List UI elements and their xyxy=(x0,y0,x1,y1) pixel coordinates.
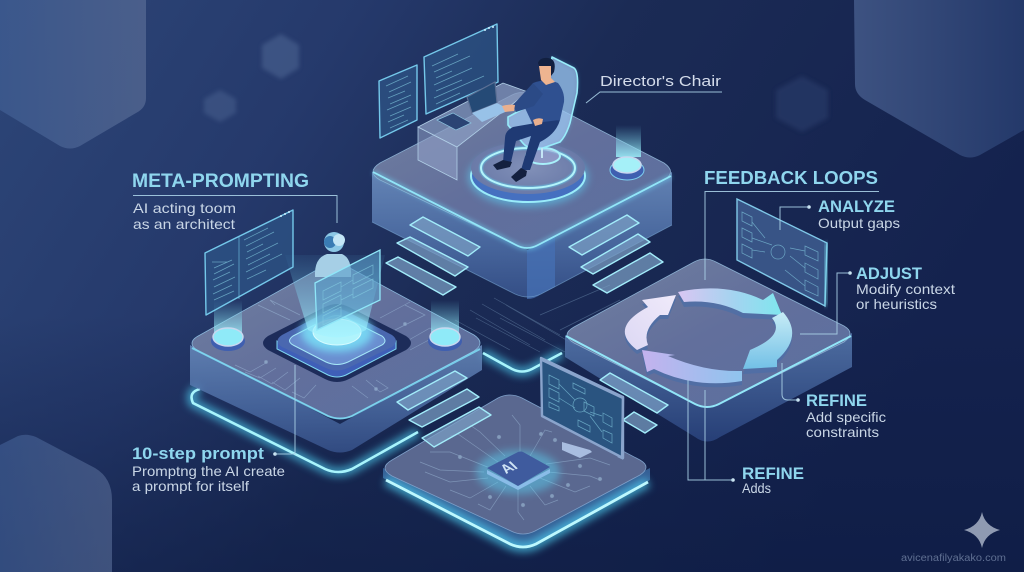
arrow: top xyxy=(678,288,782,315)
slabs beneath top platform xyxy=(386,215,663,295)
label: refine specific: Add specific xyxy=(806,409,886,425)
glow line: left base xyxy=(192,353,562,472)
monitor foreground edge xyxy=(542,360,623,458)
panel: bottom AI chip platform xyxy=(383,395,650,547)
label: meta-prompting: AI acting toom xyxy=(133,200,236,216)
circuit traces under top platform xyxy=(455,285,640,352)
icon: robot xyxy=(315,232,351,277)
label: 10-step prompt: Promptng the AI create xyxy=(132,463,285,479)
label: refine adds: REFINE xyxy=(742,465,804,483)
panel: right feedback platform xyxy=(565,259,852,442)
label: 10-step prompt: a prompt for itself xyxy=(132,478,249,494)
central stage xyxy=(277,341,396,377)
label: refine adds: Adds xyxy=(742,480,771,496)
circuit traces xyxy=(235,300,440,398)
label: meta-prompting: META-PROMPTING xyxy=(132,171,309,192)
chip label: AI xyxy=(497,459,522,477)
label: refine adds xyxy=(688,380,804,496)
label: adjust: or heuristics xyxy=(856,296,937,312)
label: meta-prompting xyxy=(132,171,337,232)
slabs beneath right platform xyxy=(600,373,668,433)
panel: left meta-prompting platform xyxy=(190,255,482,452)
label: adjust: ADJUST xyxy=(856,265,922,283)
label: analyze: Output gaps xyxy=(818,215,900,231)
slabs beneath left platform xyxy=(397,371,491,447)
label: analyze xyxy=(780,198,900,231)
label: 10-step prompt xyxy=(132,365,295,494)
label: refine specific: constraints xyxy=(806,424,879,440)
laptop xyxy=(467,82,510,122)
circuit traces xyxy=(420,415,610,520)
label: meta-prompting: as an architect xyxy=(133,216,235,232)
watermark text: avicenafilyakako.com xyxy=(901,553,1006,564)
label: 10-step prompt: 10-step prompt xyxy=(132,444,264,463)
label: feedback loops: FEEDBACK LOOPS xyxy=(704,167,878,188)
chip glow xyxy=(476,450,560,494)
monitor with flow diagram xyxy=(541,358,623,458)
rotating dais xyxy=(468,142,588,207)
code screens behind desk xyxy=(379,24,498,138)
chip xyxy=(487,452,550,490)
label: adjust: Modify context xyxy=(856,281,955,297)
arrow: bottom xyxy=(642,350,742,383)
dark recess xyxy=(263,304,411,382)
pillar on top platform xyxy=(610,125,644,180)
hologram panel xyxy=(315,250,380,330)
label: director's chair xyxy=(586,73,722,103)
arrow: right xyxy=(743,312,792,369)
desk xyxy=(418,82,528,180)
hologram beam xyxy=(285,255,385,338)
label: refine specific xyxy=(782,363,886,440)
label: director's chair: Director's Chair xyxy=(600,73,721,90)
arrow: left xyxy=(625,295,676,350)
label: feedback loops xyxy=(704,167,879,280)
figure: seated person xyxy=(493,58,564,182)
panel: top director's chair platform xyxy=(372,92,672,299)
screen: code panel left xyxy=(205,210,293,315)
label: refine specific: REFINE xyxy=(806,392,867,410)
label: adjust xyxy=(800,265,955,334)
icon: watermark star xyxy=(964,512,1000,548)
feedback loop arrows xyxy=(625,288,792,387)
flow diagram screen xyxy=(737,199,827,306)
director's chair xyxy=(508,57,578,158)
label: analyze: ANALYZE xyxy=(818,198,895,216)
pillars on left platform xyxy=(211,300,462,351)
